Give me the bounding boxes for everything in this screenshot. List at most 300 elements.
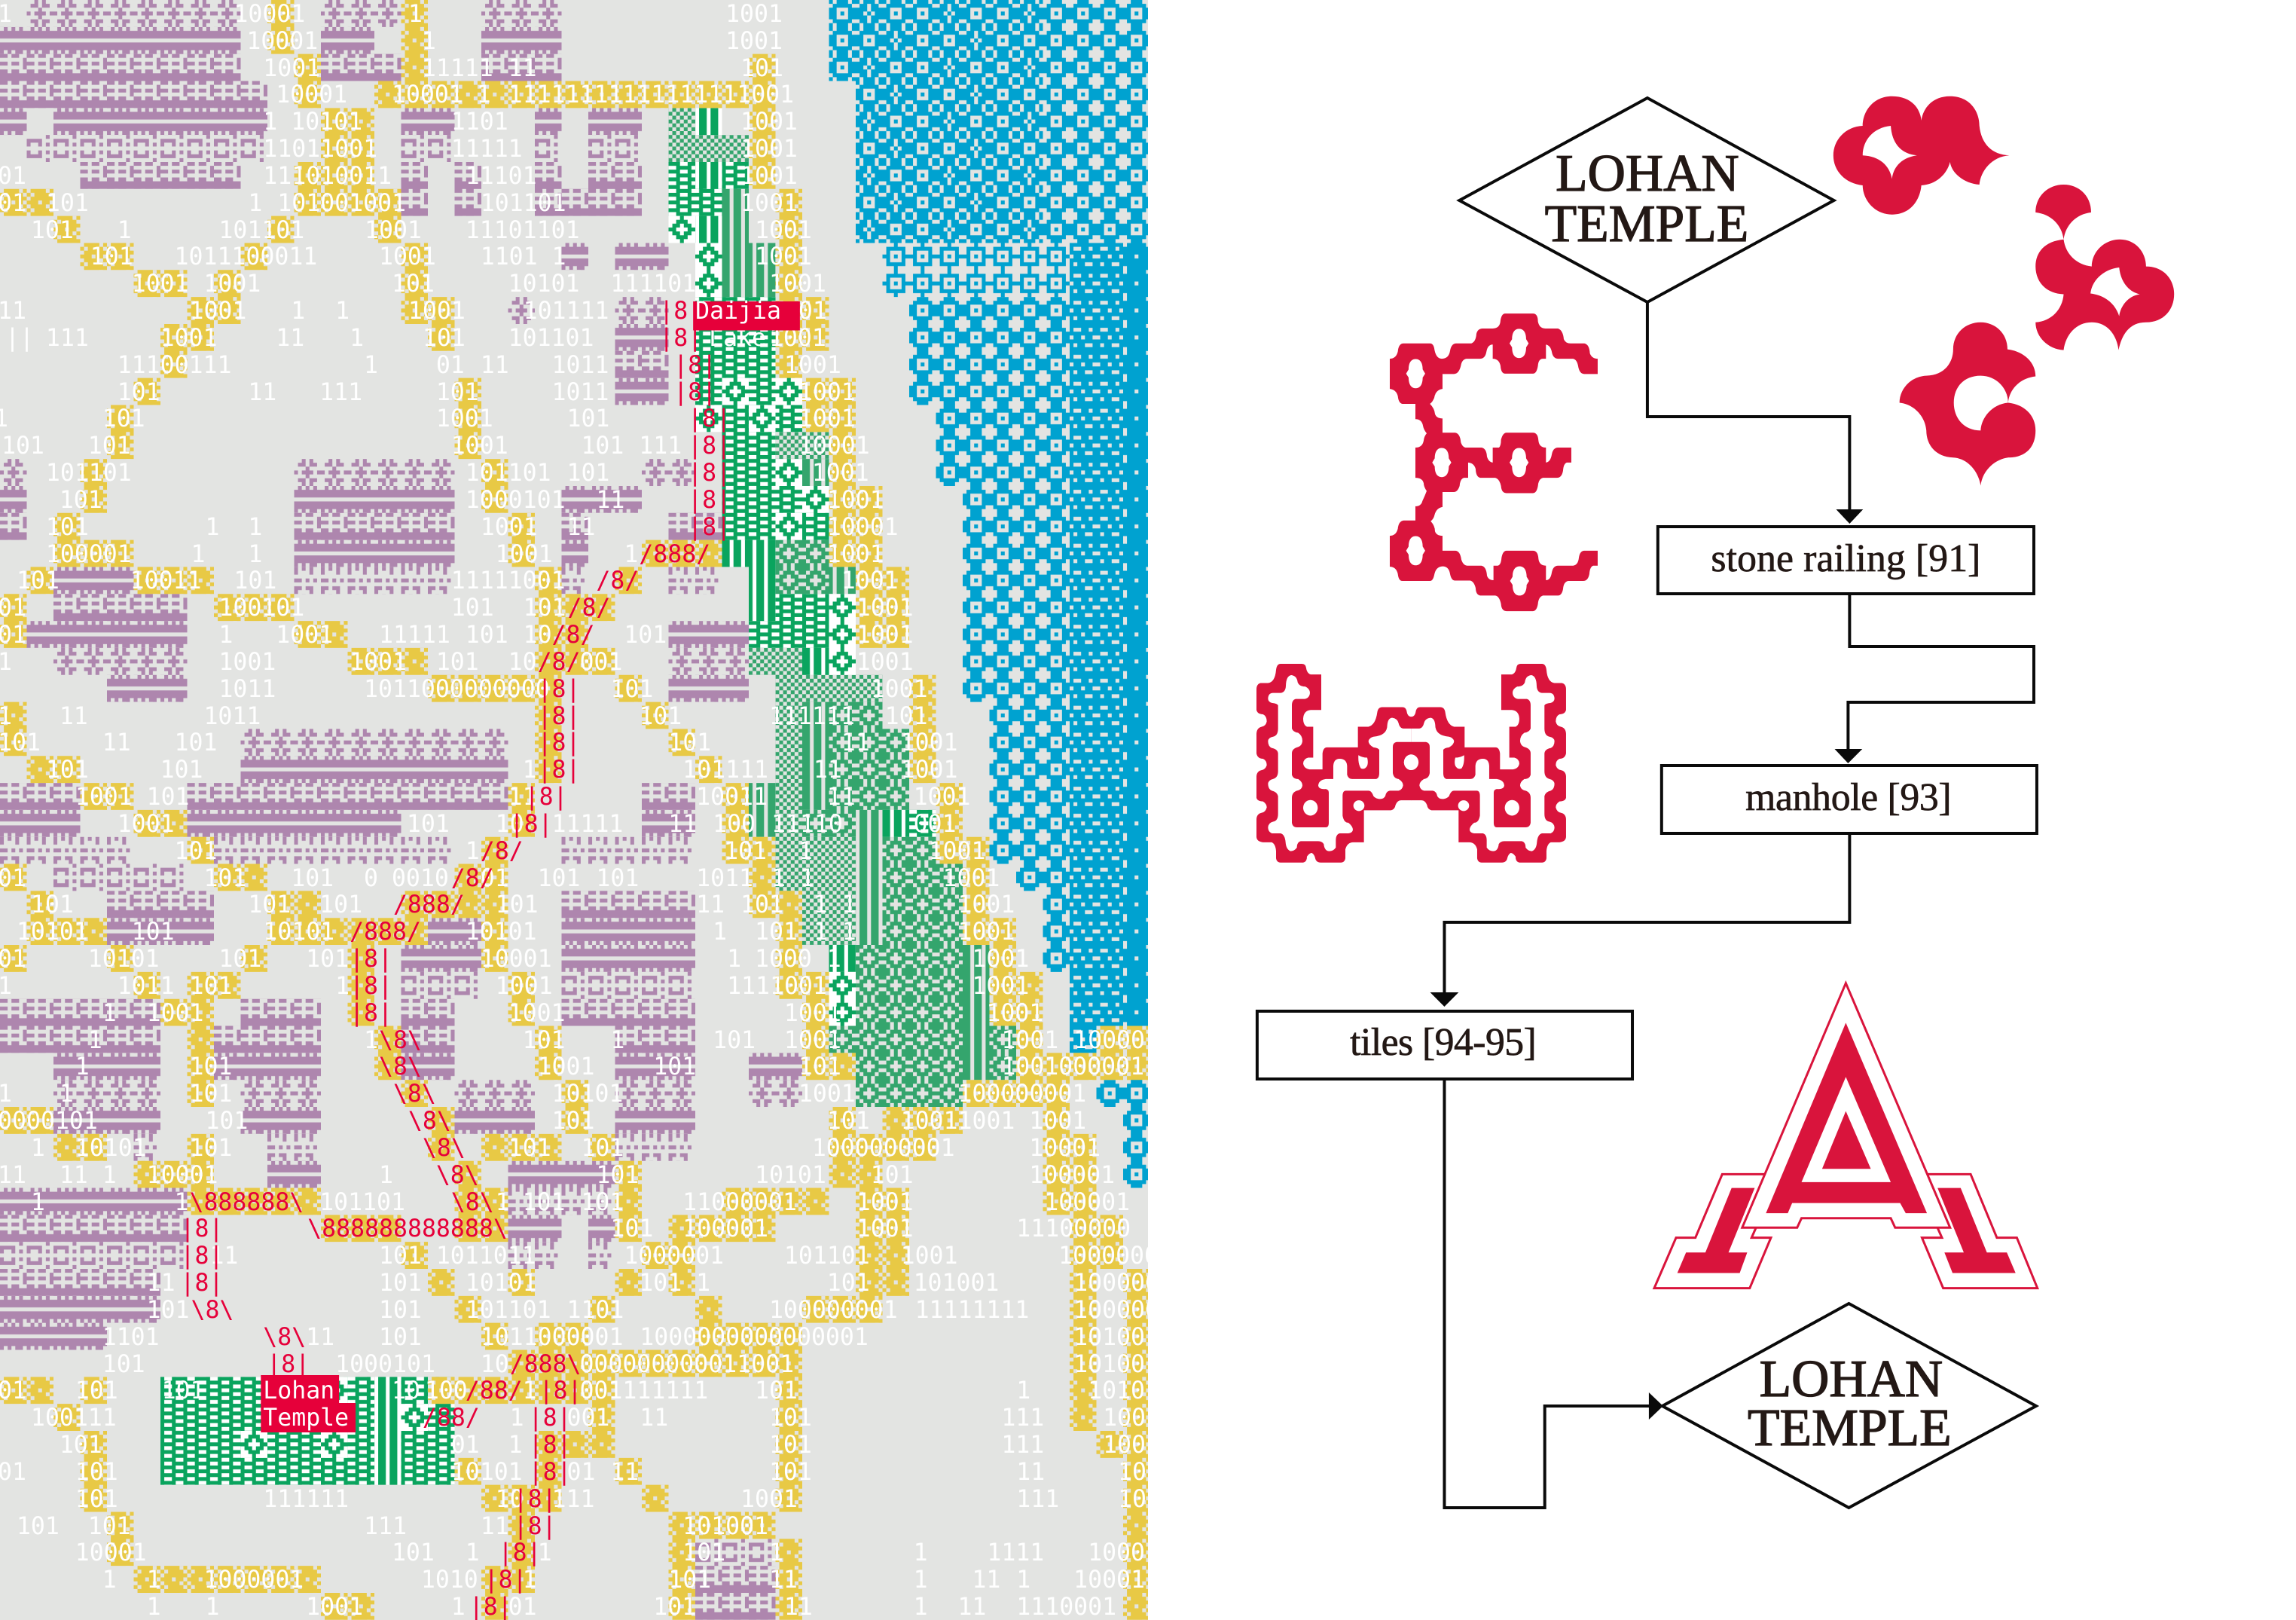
blue sea: medium dense pattern xyxy=(1070,243,1123,1053)
white binary text: 10001 xyxy=(234,1,305,28)
white binary text: 1001 xyxy=(725,28,783,55)
white binary text: 111 xyxy=(46,325,89,352)
white binary text: 101101 xyxy=(46,460,132,487)
white binary text: 101101 xyxy=(466,460,551,487)
white binary text: 101101 xyxy=(784,1243,870,1270)
panel: flowchart, clouds and letter A xyxy=(1257,96,2174,1508)
white binary text: 100 xyxy=(425,1377,468,1405)
red route text: |8| xyxy=(538,676,580,703)
white binary text: 101 xyxy=(740,55,783,82)
white binary text: 101 xyxy=(132,919,175,946)
white binary text: 1001 xyxy=(798,379,856,406)
white binary text: 1 xyxy=(175,1189,189,1216)
white binary text: 101 xyxy=(653,1053,696,1081)
white binary text: 101101 xyxy=(218,217,304,244)
white binary text: 1 xyxy=(552,243,566,271)
blue sea: large cross pattern xyxy=(883,243,1070,297)
white binary text: 10001 xyxy=(75,1539,147,1567)
red route text: /88/ xyxy=(423,1405,480,1432)
white binary text: 10001 xyxy=(481,946,552,973)
white binary text: 1001 xyxy=(740,190,798,217)
icon: cloud right xyxy=(2035,185,2174,350)
flowchart start: Lohan Temple diamond: LOHAN xyxy=(1556,145,1739,203)
white binary text: 1011 xyxy=(696,865,753,892)
red route text: |8 xyxy=(659,298,688,325)
white binary text: 1001 xyxy=(350,649,407,676)
white binary text: 10011 xyxy=(130,567,202,595)
white binary text: 1001 xyxy=(365,217,422,244)
icon: red ornamental letter H xyxy=(1256,664,1566,863)
red route text: \8\ xyxy=(263,1324,306,1351)
white binary text: 001 xyxy=(579,649,622,676)
white binary text: 1001 xyxy=(189,298,246,325)
white binary text: 1001 xyxy=(901,757,958,784)
white binary text: 111 xyxy=(364,1513,407,1540)
white binary text: 1001 xyxy=(755,243,812,271)
white binary text: 1001 xyxy=(798,1081,856,1108)
white binary text: 100001 xyxy=(1044,1189,1130,1216)
white binary text: 10101 xyxy=(466,919,537,946)
white binary text: 1001 xyxy=(871,676,928,703)
white binary text: 100000 xyxy=(1073,1297,1159,1324)
red route text: |8| xyxy=(469,1594,512,1620)
flowchart start: Lohan Temple diamond xyxy=(1459,98,1833,302)
white binary text: 101 xyxy=(218,946,261,973)
white binary text: 101 xyxy=(885,703,928,730)
arrow: tiles to temple xyxy=(1444,1079,1663,1508)
white binary text: 1 xyxy=(88,1027,102,1054)
white binary text: 101 xyxy=(88,1513,131,1540)
white binary text: 1 xyxy=(827,946,841,973)
white binary text: 100 xyxy=(713,811,756,838)
white binary text: 1 xyxy=(350,325,364,352)
red route text: \8\ xyxy=(393,1081,436,1108)
white binary text: 1 xyxy=(1016,1567,1030,1594)
white binary text: 10101 xyxy=(755,1162,826,1189)
white binary text: 101 xyxy=(248,891,291,919)
white binary text: 11 xyxy=(481,1513,509,1540)
white binary text: 10101 xyxy=(466,1270,537,1297)
white binary text: 1 xyxy=(60,1081,74,1108)
box: stone railing: stone railing [91] xyxy=(1711,537,1980,580)
white binary text: 1001 xyxy=(812,460,869,487)
white binary text: 1001 xyxy=(508,1000,566,1027)
white binary text: 101 xyxy=(379,1243,422,1270)
box: manhole xyxy=(1662,766,2037,833)
white binary text: 1 xyxy=(364,1027,378,1054)
icon: red outlined letter A xyxy=(1654,983,2038,1288)
white binary text: 11 xyxy=(784,1594,813,1620)
white binary text: 1 xyxy=(147,1594,161,1620)
white binary text: 11111001 xyxy=(451,567,566,595)
white binary text: 101 xyxy=(88,433,131,460)
white binary text: 1 xyxy=(798,838,813,865)
white binary text: 1 xyxy=(914,1539,928,1567)
white binary text: 11 xyxy=(972,1567,1000,1594)
white binary text: 1001 xyxy=(276,622,333,649)
red route text: |8| xyxy=(525,784,568,811)
white binary text: 1000 xyxy=(1088,1539,1145,1567)
white binary text: 11110 xyxy=(771,811,843,838)
white binary text: 1 xyxy=(538,1539,552,1567)
white binary text: 101 xyxy=(523,1189,566,1216)
purple buildings: band rows xyxy=(0,27,802,1350)
white binary text: 10 xyxy=(1118,1459,1146,1486)
white binary text: 101 xyxy=(755,919,798,946)
white binary text: 101 xyxy=(581,1189,624,1216)
red route text: |8| xyxy=(538,703,580,730)
white binary text: 1000001 xyxy=(203,1567,304,1594)
white binary text: 101 xyxy=(524,595,566,622)
white binary text: 1001 xyxy=(75,784,133,811)
red route text: |8| xyxy=(510,811,553,838)
white binary text: 10101 xyxy=(88,946,160,973)
yellow roads xyxy=(0,0,1150,1620)
white binary text: 11111 xyxy=(552,811,623,838)
white binary text: 100000 xyxy=(1073,1270,1159,1297)
white binary text: 101 xyxy=(682,1539,725,1567)
red route text: \888888888888\ xyxy=(307,1215,508,1243)
red route text: |8| xyxy=(529,1459,572,1486)
white binary text: 1110001 xyxy=(1016,1594,1116,1620)
purple buildings: hook rows xyxy=(0,135,776,1566)
white binary text: 101 xyxy=(871,1162,914,1189)
white binary text: 11100111 xyxy=(118,352,231,379)
white binary text: 11 xyxy=(276,325,304,352)
white binary text: 1000101 xyxy=(466,487,566,514)
white binary text: 1 xyxy=(364,352,378,379)
red route text: \8\ xyxy=(379,1027,422,1054)
white binary text: 10011001 xyxy=(901,1108,1015,1135)
red route text: |8| xyxy=(688,433,731,460)
red route text: /888/ xyxy=(350,919,421,946)
white binary text: 10101 xyxy=(75,1135,147,1162)
white binary text: 1 1 xyxy=(814,919,856,946)
white binary text: 111 xyxy=(1016,1486,1059,1513)
white binary text: 1111001 xyxy=(727,973,827,1000)
white binary text: 101 xyxy=(724,838,767,865)
white binary text: 1011100011 xyxy=(175,243,317,271)
white binary text: 101 xyxy=(75,1486,118,1513)
white binary text: 1 xyxy=(727,946,741,973)
white binary text: 100001 xyxy=(682,1215,768,1243)
white binary text: 1001 xyxy=(408,298,466,325)
white binary text: 101 xyxy=(75,1377,118,1405)
arrow: stone railing to manhole xyxy=(1834,594,2034,763)
white binary text: 11 xyxy=(769,1567,798,1594)
white binary text: 0000101 xyxy=(0,1108,98,1135)
white binary text: 1010 xyxy=(421,1567,478,1594)
white binary text: 101 xyxy=(496,891,539,919)
red route text: |8| xyxy=(499,1539,542,1567)
white binary text: 1001 xyxy=(784,1000,841,1027)
white binary text: 10 xyxy=(496,811,524,838)
red route text: |8| xyxy=(181,1215,223,1243)
white binary text: 101 xyxy=(379,1297,422,1324)
white binary text: 1001 xyxy=(496,973,553,1000)
white binary text: 100001 xyxy=(1029,1162,1115,1189)
white binary text: 1 xyxy=(31,1189,45,1216)
white binary text: 101 xyxy=(407,811,450,838)
white binary text: 1001 xyxy=(901,1243,958,1270)
white binary text: 11111111 xyxy=(915,1297,1029,1324)
white binary text: 11 xyxy=(814,757,842,784)
white binary text: 101 xyxy=(17,1513,60,1540)
white binary text: 1 xyxy=(191,541,205,568)
white binary text: 11 xyxy=(508,784,537,811)
box: manhole: manhole [93] xyxy=(1745,776,1952,819)
white binary text: 11 xyxy=(147,1270,176,1297)
white binary text: 1000000 xyxy=(1058,1243,1159,1270)
white binary text: 11 xyxy=(60,1162,88,1189)
red route text: /8/ xyxy=(596,567,639,595)
white binary text: 11 xyxy=(596,487,624,514)
white binary text: 101 xyxy=(306,946,349,973)
white binary text: 000000000011001 xyxy=(579,1351,794,1378)
white binary text: 101 xyxy=(147,1297,190,1324)
white binary text: 101 xyxy=(466,622,508,649)
white binary text: 1001 xyxy=(740,1486,798,1513)
white binary text: 10101 xyxy=(508,271,580,298)
label: Daijia xyxy=(693,298,800,330)
green river: diamond motifs xyxy=(241,216,856,1458)
white binary text: 101 xyxy=(392,271,435,298)
white binary text: 101001001 xyxy=(277,190,406,217)
white binary text: 11000001 xyxy=(682,1189,797,1216)
white binary text: 10001 xyxy=(1073,1567,1145,1594)
white binary text: 1 xyxy=(205,1594,219,1620)
white binary text: 11 xyxy=(566,514,595,541)
purple buildings: tick rows xyxy=(0,567,722,1269)
white binary text: 101 xyxy=(653,1594,696,1620)
white binary text: 100000001 xyxy=(769,1297,898,1324)
white binary text: 1101 xyxy=(481,243,538,271)
white binary text: 1001 xyxy=(118,811,175,838)
white binary text: 100111 xyxy=(31,1405,117,1432)
white binary text: 1101 xyxy=(102,1324,160,1351)
white binary text: 1 xyxy=(523,757,537,784)
white binary text: 1111 xyxy=(987,1539,1044,1567)
white binary text: 101101 xyxy=(481,190,566,217)
white binary text: 1001 xyxy=(160,325,217,352)
white binary text: 1011 xyxy=(203,703,261,730)
white binary text: 10011 xyxy=(696,784,768,811)
red route text: \8\ xyxy=(436,1162,479,1189)
purple buildings: flower rows xyxy=(0,0,802,1107)
white binary text: 0 xyxy=(364,865,378,892)
white binary text: 1 xyxy=(466,1539,480,1567)
red route text: \8\ xyxy=(191,1297,234,1324)
white binary text: 1 xyxy=(477,81,491,109)
white binary text: 1001000001 xyxy=(1001,1053,1144,1081)
white binary text: 11111 xyxy=(451,136,523,163)
white binary text: 101 xyxy=(319,891,362,919)
white binary text: 10 xyxy=(1118,1486,1146,1513)
white binary text: 101 xyxy=(436,379,479,406)
white binary text: 10100 xyxy=(1073,1324,1145,1351)
white binary text: 101 xyxy=(423,325,466,352)
white binary text: 1 xyxy=(218,622,233,649)
white binary text: 1101 xyxy=(566,1297,624,1324)
white binary text: 101101 xyxy=(319,1189,405,1216)
white binary text: 101 xyxy=(624,622,667,649)
white binary text: 1001 xyxy=(263,55,320,82)
red route text: |8| xyxy=(688,405,731,433)
white binary text: 1 xyxy=(335,298,350,325)
white binary text: 111 xyxy=(1001,1432,1044,1459)
white binary text: 100001 xyxy=(1073,1027,1159,1054)
white binary text: 11 xyxy=(209,1243,238,1270)
red route text: /888\ xyxy=(510,1351,582,1378)
white binary text: 11 xyxy=(481,352,509,379)
box: stone railing xyxy=(1658,527,2034,594)
white binary text: 1 xyxy=(510,1405,524,1432)
red route text: |8| xyxy=(350,973,392,1000)
white binary text: 101 xyxy=(75,1459,118,1486)
white binary text: 101 xyxy=(160,757,203,784)
panel: flowchart background xyxy=(1148,0,2296,1620)
icon: cloud top xyxy=(1833,96,2009,215)
arrow: temple to stone railing xyxy=(1647,302,1863,524)
white binary text: 11 xyxy=(668,811,697,838)
white binary text: 1001 xyxy=(856,595,914,622)
white binary text: 11 xyxy=(610,1459,639,1486)
red route text: |8| xyxy=(181,1270,223,1297)
white binary text: 111 xyxy=(552,1486,594,1513)
white binary text: 11 xyxy=(827,784,856,811)
white binary text: 10001 xyxy=(827,514,899,541)
white binary text: 10 xyxy=(392,1377,420,1405)
white binary text: 1001 xyxy=(942,865,1000,892)
blue sea: ring pattern xyxy=(829,0,1043,243)
white binary text: 1011000000000 xyxy=(364,676,550,703)
red route text: \8\ xyxy=(379,1053,422,1081)
white binary text: 1 xyxy=(451,1594,466,1620)
white binary text: 11 xyxy=(60,703,88,730)
white binary text: 1001 xyxy=(379,243,436,271)
white binary text: 1 xyxy=(408,1,423,28)
white binary text: 1 xyxy=(496,1189,510,1216)
white binary text: 10 xyxy=(496,1486,524,1513)
white binary text: 1 xyxy=(466,838,480,865)
panel: pixel map xyxy=(0,0,1159,1620)
red route text: /8/ xyxy=(538,649,580,676)
white binary text: 101 xyxy=(46,514,89,541)
white binary text: 1001 xyxy=(538,1053,594,1081)
white binary text: 111 xyxy=(1001,1405,1044,1432)
red route text: |8| xyxy=(514,1513,557,1540)
red route text: |8| xyxy=(538,729,580,757)
white binary text: 101001 xyxy=(682,1513,768,1540)
white binary text: 101 xyxy=(552,1108,594,1135)
white binary text: 1 xyxy=(1016,1377,1030,1405)
white binary text: Lake xyxy=(709,325,766,352)
white binary text: 101 xyxy=(162,1377,204,1405)
white binary text: 1001 xyxy=(496,541,553,568)
white binary text: 101 xyxy=(436,649,479,676)
white binary text: 1 xyxy=(914,1594,928,1620)
white binary text: 1001 xyxy=(725,1,783,28)
white binary text: 1001 xyxy=(798,405,856,433)
white binary text: 10001 xyxy=(276,81,347,109)
white binary text: 1001 xyxy=(856,622,914,649)
white binary text: 101 xyxy=(769,1459,812,1486)
white binary text: 11101101 xyxy=(466,217,580,244)
red route text xyxy=(181,298,731,1620)
white binary text: 1001 xyxy=(203,271,261,298)
white binary text: 1 xyxy=(769,1539,783,1567)
white binary text: 1 xyxy=(102,1162,117,1189)
white binary text: 101 xyxy=(31,891,74,919)
white binary text: 1001 xyxy=(929,838,985,865)
white binary text: 11011001 xyxy=(263,136,377,163)
white binary text: 1101 xyxy=(451,109,508,136)
red route text: /8/ xyxy=(567,595,610,622)
white binary text: 101001 xyxy=(914,1270,999,1297)
red route text: |8| xyxy=(539,1377,582,1405)
white binary text: 101 xyxy=(523,1027,566,1054)
flowchart start: Lohan Temple diamond: TEMPLE xyxy=(1545,195,1748,253)
white binary text: 1 xyxy=(263,109,277,136)
green river: vivid stripes xyxy=(374,108,909,1485)
white binary text: 101 xyxy=(740,891,783,919)
white binary text: 1 xyxy=(205,514,219,541)
white binary text: 1001 xyxy=(451,433,508,460)
white binary text: 01 xyxy=(566,1459,595,1486)
white binary text: 101 xyxy=(60,487,102,514)
white binary text: 101 xyxy=(827,1108,870,1135)
white binary text: 101 xyxy=(508,1135,551,1162)
white binary text: 01 xyxy=(508,1594,537,1620)
white binary text: 101 xyxy=(755,1377,798,1405)
white binary text: 1 xyxy=(118,217,132,244)
white binary text: 11 xyxy=(640,1405,668,1432)
white binary text: 11 xyxy=(696,891,725,919)
white binary text: 001 xyxy=(566,1405,609,1432)
red route text: |8| xyxy=(673,379,716,406)
blue sea: small cross pattern xyxy=(909,0,1150,1188)
white binary text: 1001 xyxy=(740,136,798,163)
white binary text: 111101 xyxy=(610,271,696,298)
white binary text: 01 xyxy=(451,1432,480,1459)
red route text: |8| xyxy=(484,1567,527,1594)
white binary text: 101 xyxy=(31,217,74,244)
red route text: |8| xyxy=(659,325,702,352)
red route text: |8| xyxy=(514,1486,557,1513)
white binary text: 111111 xyxy=(263,1486,349,1513)
white binary text: 1 xyxy=(248,514,262,541)
white binary text: 10 xyxy=(481,1351,509,1378)
white binary text: 101 xyxy=(827,1270,870,1297)
white binary text: 10001 xyxy=(246,28,318,55)
white binary text: 111 xyxy=(319,379,362,406)
white binary text: 1 xyxy=(523,1567,537,1594)
white binary text: 100 xyxy=(1103,1405,1146,1432)
white binary text: 1001 xyxy=(436,405,493,433)
white binary text: 10001 xyxy=(147,1162,218,1189)
white binary text: 1001 xyxy=(841,567,899,595)
red route text: \8\ xyxy=(451,1189,494,1216)
white binary text: 1 1 xyxy=(771,865,814,892)
white binary text: 111010011 xyxy=(263,163,392,190)
white binary text: 101 xyxy=(102,1351,145,1378)
white binary text: 1001 xyxy=(306,1594,363,1620)
red route text: \888888\ xyxy=(189,1189,304,1216)
white binary text: 11111111111111111001 xyxy=(508,81,794,109)
white binary text: 10001 xyxy=(1029,1135,1101,1162)
white binary text: 101 xyxy=(118,379,160,406)
white binary text: 1001 xyxy=(755,217,812,244)
